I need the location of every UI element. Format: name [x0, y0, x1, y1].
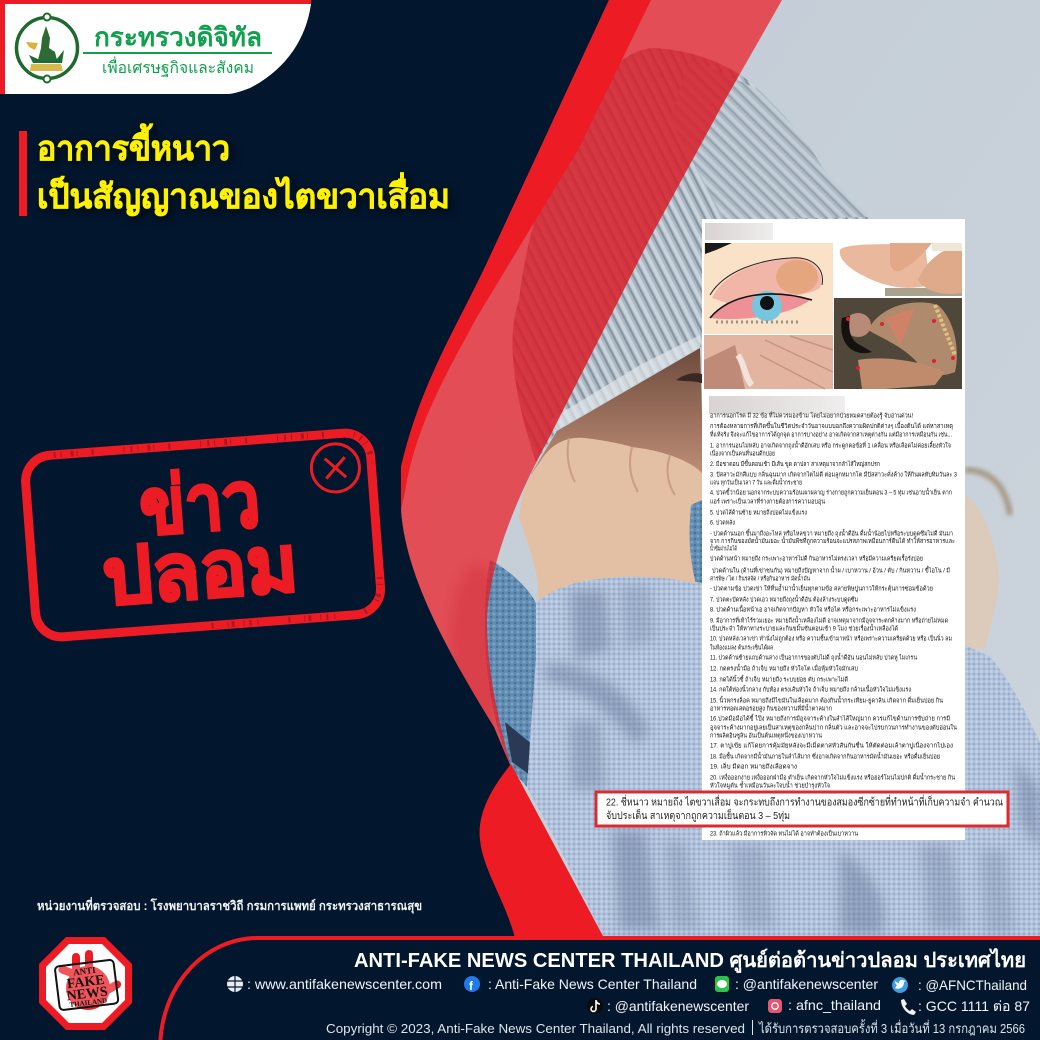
x mark: [310, 442, 361, 494]
blurred heading bar: [709, 396, 845, 414]
article text: 1. อาการนอนไม่หลับ อาจเกิดจากถุงน้ำดีอักเสบ หรือ กระดูกคอข้อที่ 1 เคลื่อน หรือเลือดไม่ค่อยเลี้ยงหัวใจ: [710, 440, 951, 450]
right hand and hair: [965, 470, 1010, 650]
foot photo: [834, 243, 962, 296]
red diagonal band: [401, 0, 651, 510]
contacts: [247, 976, 1030, 1014]
icon: facebook: f: [469, 979, 474, 993]
stamp text: [95, 452, 301, 621]
article text: 13. กดได้นิ้วชี้ ถ้าเจ็บ หมายถึง ระบบย่อย ตับ กระเพาะไม่ดี: [710, 674, 848, 684]
source note: หน่วยงานที่ตรวจสอบ : โรงพยาบาลราชวิถี กรมการแพทย์ กระทรวงสาธารณสุข: [37, 897, 422, 914]
article text: อาการนอกโรค มี 32 ข้อ ที่ไม่ควรมองข้าม โดยไม่อยากป่วยหมดสายต้องรู้ จับอ่านด่วน!: [710, 410, 913, 420]
contacts: : @antifakenewscenter: [735, 976, 878, 992]
light blue sweater: [527, 576, 1040, 936]
contacts: : @AFNCThailand: [918, 977, 1027, 993]
icon: globe: [227, 976, 243, 992]
ministry logo header: เพื่อเศรษฐกิจและสังคม: [102, 56, 254, 77]
article text: 15. นิ้วหกรงล็อค หมายถึงมีไขมันในเลือดมาก ต้องกินน้ำกระเทียม-ยูคาลิน เกิดจาก ดื่มเย็นบ่อย กิน: [710, 696, 944, 704]
contacts: : GCC 1111 ต่อ 87: [918, 998, 1030, 1014]
article text: 20. เหงื่อออกง่าย เหงื่อออกฝ่ามือ ตำเย็น เกิดจากหัวใจไม่แข็งแรง หรือฮอร์โมนไม่ปกติ ดื่มน้ำกระชาย กิน: [710, 772, 956, 782]
article text: หัวใจหมูตัน ช้ำเหมือนวันละใจบน้ำ ช่วยบำรุงหัวใจ: [710, 780, 830, 790]
article text: 18. มือชื้น เกิดจากมีน้ำมันภายในลำไส้มาก ซึ่งอาจเกิดจากกินอาหารมัดน้ำมันเยอะ หรือดื่มเย็นบ่อย: [710, 752, 940, 760]
skin rash photo: [704, 335, 833, 389]
contacts: : Anti-Fake News Center Thailand: [488, 976, 697, 992]
emblem: [16, 14, 78, 82]
title: [19, 123, 450, 217]
article text: จาก การกินของมัดน้ำมันเยอะ น้ำมันพืชที่ถูกความร้อนจะแปรสภาพเหมือนการ์ดีนได้ ทำให้สารอาหารและ: [710, 536, 955, 545]
article text: แจน ทุกวันเป็นเวลา 7 วัน และดื่มน้ำกระชาย: [710, 478, 802, 486]
contacts: : afnc_thailand: [788, 997, 881, 1013]
article text: 3. ปัสสาวะมักสีแบบ กลิ่นฉุนมาก เกิดจากไตไม่ดี ต่อมลูกหมากโต มีปัสสาวะคั่งค้าง ให้กินผลทับทิมวันละ 3: [710, 470, 957, 478]
stamp wordmark: FAKE: [66, 973, 106, 992]
blurred name bar: [705, 223, 773, 240]
article text: ปวดด้านใน (ด้านที่เข่าชนกัน) หมายถึงปัญหาจาก น้ำผ / เบาหวาน / อ้วน / ตับ / กินหวาน / ขี้ไอโน / มี: [712, 566, 950, 574]
article text: - ปวดด้านนอก ขึ้นมาถึงอะไหล่ หรือไหลขวา หมายถึง ถุงน้ำดีอัน ดื่มน้ำน้อยไปหรือระบบดูดซึมไม่ดี มันมา: [710, 528, 953, 538]
article text: 5. ปวดไส้ด้านซ้าย หมายถึงปอดไม่แข็งแรง: [710, 508, 807, 516]
fist: [519, 438, 702, 600]
document screenshot: [702, 219, 965, 840]
article text: น้ำซึมผ่านไม่ได้: [710, 544, 737, 552]
stamp wordmark: ANTI: [73, 965, 97, 977]
red curved blob: [480, 764, 604, 938]
article text: 23. ถ้าผิวแล้ว มีอาการหิวจัด ทนไม่ได้ อาจทำต้องเป็นเบาหวาน: [710, 828, 859, 838]
body pain illustration: [834, 298, 962, 389]
beanie: [513, 48, 900, 462]
article text: ปวดด้านหน้า หมายถึง กระเพาะอาหารไม่ดี กินอาหารไม่ตรงเวลา หรือมีความเครียดเรื้อรังบ่อย: [710, 554, 923, 562]
stamp text: ข่าว: [137, 455, 263, 552]
dark blue turtleneck: [485, 560, 536, 787]
article text: อาหารทอดเสตอรอยสูง กินของหวานที่มีน้ำตาลมาก: [710, 704, 832, 712]
icon: phone: [901, 999, 916, 1015]
article text: เป็นประจำ ให้หาทางระบายและกินขมิ้นชันตอนเช้า 9 โมง ช่วยเรื่องน้ำเหลืองได้: [710, 624, 898, 632]
article text: 9. มีอาการที่เท้าไร้รวมเยอะ หมายถึงน้ำเหลืองไม่ดี อาจเหตุมาจากมีอุจจาระตกค้างมาก หรือถ่ายไม่หมด: [710, 616, 948, 624]
article text: เนื่องจากเป็นคนที่นอนดึกบ่อย: [710, 448, 775, 458]
article text: การต้องหลายการที่เกิดขึ้นในชีวิตประจำวันอาจแบบอกถึงความผิดปกติต่างๆ เบื้องต้นได้ แต่หาสาเหตุ: [710, 421, 953, 430]
icon: instagram: [768, 999, 782, 1013]
stamp text: ปลอม: [100, 519, 301, 621]
callout: highlighted item 22: จับประเด็น สาเหตุจากถูกความเย็นตอน 3 – 5ทุ่ม: [606, 808, 790, 822]
article text: 11. ปวดด้านซ้ายแถบด้านล่าง เป็นอาการของตับไม่ดี ถุงน้ำดีอัน นอนไม่หลับ ปวดหู ไมเกรน: [710, 652, 918, 662]
article text: อุจจาระค้างมากอยู่เลยเป็นสาเหตุของกลิ่นปาก กลิ่นตัว และอาจจะไปรบกวนการทำงานของตับอ่อนใน: [710, 722, 958, 732]
article text: 8. ปวดด้านเนื้อหน้าเอ อาจเกิดจากปัญหา หัวใจ หรือไต หรือกระเพาะอาหารไม่แข็งแรง: [710, 604, 916, 614]
sweater dark streaks: [545, 585, 1040, 935]
shadow under turtleneck: [505, 722, 533, 775]
stamp wordmark: NEWS: [66, 984, 109, 1004]
icon: line: [715, 976, 729, 992]
footer band: [160, 938, 1040, 1040]
ministry logo header: [0, 0, 311, 94]
article text: 4. ปวดขี้ว่าน้อย นอกจากระบบความร้อนเผาผลาญ ร่างกายถูกความเย็นตอน 3 – 5 ทุ่ม เช่นอาบน้ำเย็น ตาก: [710, 488, 952, 496]
article text: 2. มือชาตอน มีขึ้นตอนเช้า มีเส้น ขูด ตาปลา สาเหตุมาจากลำไส้ใหญ่สกปรก: [710, 459, 880, 468]
stamp wordmark: [55, 960, 119, 1010]
contacts: : www.antifakenewscenter.com: [247, 976, 442, 992]
article text: 12. กดตรงน้ำมือ ถ้าเจ็บ หมายถึง หัวใจโต เมื่อหุ้มหัวใจมักเสบ: [710, 664, 858, 672]
photo: woman in winter clothing: [400, 0, 1040, 940]
icon: twitter: [892, 977, 908, 993]
red hand: [57, 950, 123, 1010]
stamp wordmark: THAILAND: [69, 997, 108, 1009]
copyright line: Copyright © 2023, Anti-Fake News Center Thailand, All rights reserved: [326, 1021, 745, 1036]
article text: 16.ปวดมือมือได้ขี้ ไป๊ง หมายถึงการมีอุจจาระค้างในลำไส้ใหญ่มาก ควรแก้ไขด้านการขับถ่าย การมี: [710, 714, 950, 722]
article text: 6. ปวดหลัง: [710, 520, 735, 526]
ministry name: กระทรวงดิจิทัล: [94, 22, 262, 52]
stamp: fake news: [24, 431, 382, 639]
article text: แอร์ เพราะเป็นเวลาที่ร่างกายต้องการความอบอุ่น: [710, 496, 826, 506]
title: เป็นสัญญาณของไตขวาเสื่อม: [37, 172, 450, 217]
copyright line: [326, 1019, 1025, 1036]
article text: การผลิตอินซูลิน อันเป็นต้นเหตุหนึ่งของเบาหวาน: [710, 730, 823, 740]
article text: 19. เล็บ มีดอก หมายถึงเลือดจาง: [710, 762, 797, 770]
article text: 7. ปวดตะบัดหลัง ปวดเอว หมายถึงถุงน้ำดีอัน ต้องล้างระบบดูดซึม: [710, 594, 858, 604]
translucent red band: [400, 0, 782, 766]
article text: ที่แท้จริง จึงจะแก้ไขอาการได้ถูกจุด อาการบางอย่าง อาจเกิดจากสาเหตุต่างกัน แต่มีอาการเหมือนกัน เช่น...: [710, 430, 952, 438]
footer heading: ANTI-FAKE NEWS CENTER THAILAND ศูนย์ต่อต้านข่าวปลอม ประเทศไทย: [354, 948, 1026, 974]
icon: tiktok: [587, 998, 603, 1014]
eye illustration: [704, 243, 833, 334]
article text: - ปวดตามข้อ ปวดเข่า ให้ทื่นอ้ำมาน้ำเย็นทุกตามข้อ สลายพิษปูนกาวให้กระตุ้นการซ่อมข้อด้วย: [710, 584, 933, 592]
article text: สารพิษ / ไต / กินรสจัด / หรือกินอาหาร มัดน้ำมัน: [710, 574, 811, 582]
icon: facebook: [464, 976, 480, 993]
title: อาการขี้หนาว: [37, 123, 230, 168]
callout: highlighted item 22: [596, 792, 1008, 826]
article text: 10. ปวดหลังเวลาเข่า ทำนั่งไม่ถูกต้อง หรือ ความชื้นเข้ามาหน้า หรือเพราะความเครียดด้วย หรือ เป็นนิ่ว ลม: [710, 634, 952, 642]
face: [531, 348, 704, 480]
article text: ในท้องแมลง ต้นกระเซ็นได้ผล: [710, 642, 773, 652]
article text: 14. กดใต้ท่องนิ้วกลาง กับท้อง ตรงเส้นหัวใจ ถ้าเจ็บ หมายถึง กล้ามเนื้อหัวใจไม่แข็งแรง: [710, 684, 911, 694]
article text: 17. ตาปูเข้ย แก้โดยการคุ้มมัยหลังจะมีเม็ดตาสหัวสันกันชื่น ให้ตัดต่อมเล้าตาปูเนื่องจากไปเอง: [710, 740, 953, 750]
article text: [710, 410, 958, 838]
navy background panel: [0, 0, 609, 940]
anti fake news stop sign logo: [39, 937, 132, 1030]
contacts: : @antifakenewscenter: [607, 998, 749, 1014]
